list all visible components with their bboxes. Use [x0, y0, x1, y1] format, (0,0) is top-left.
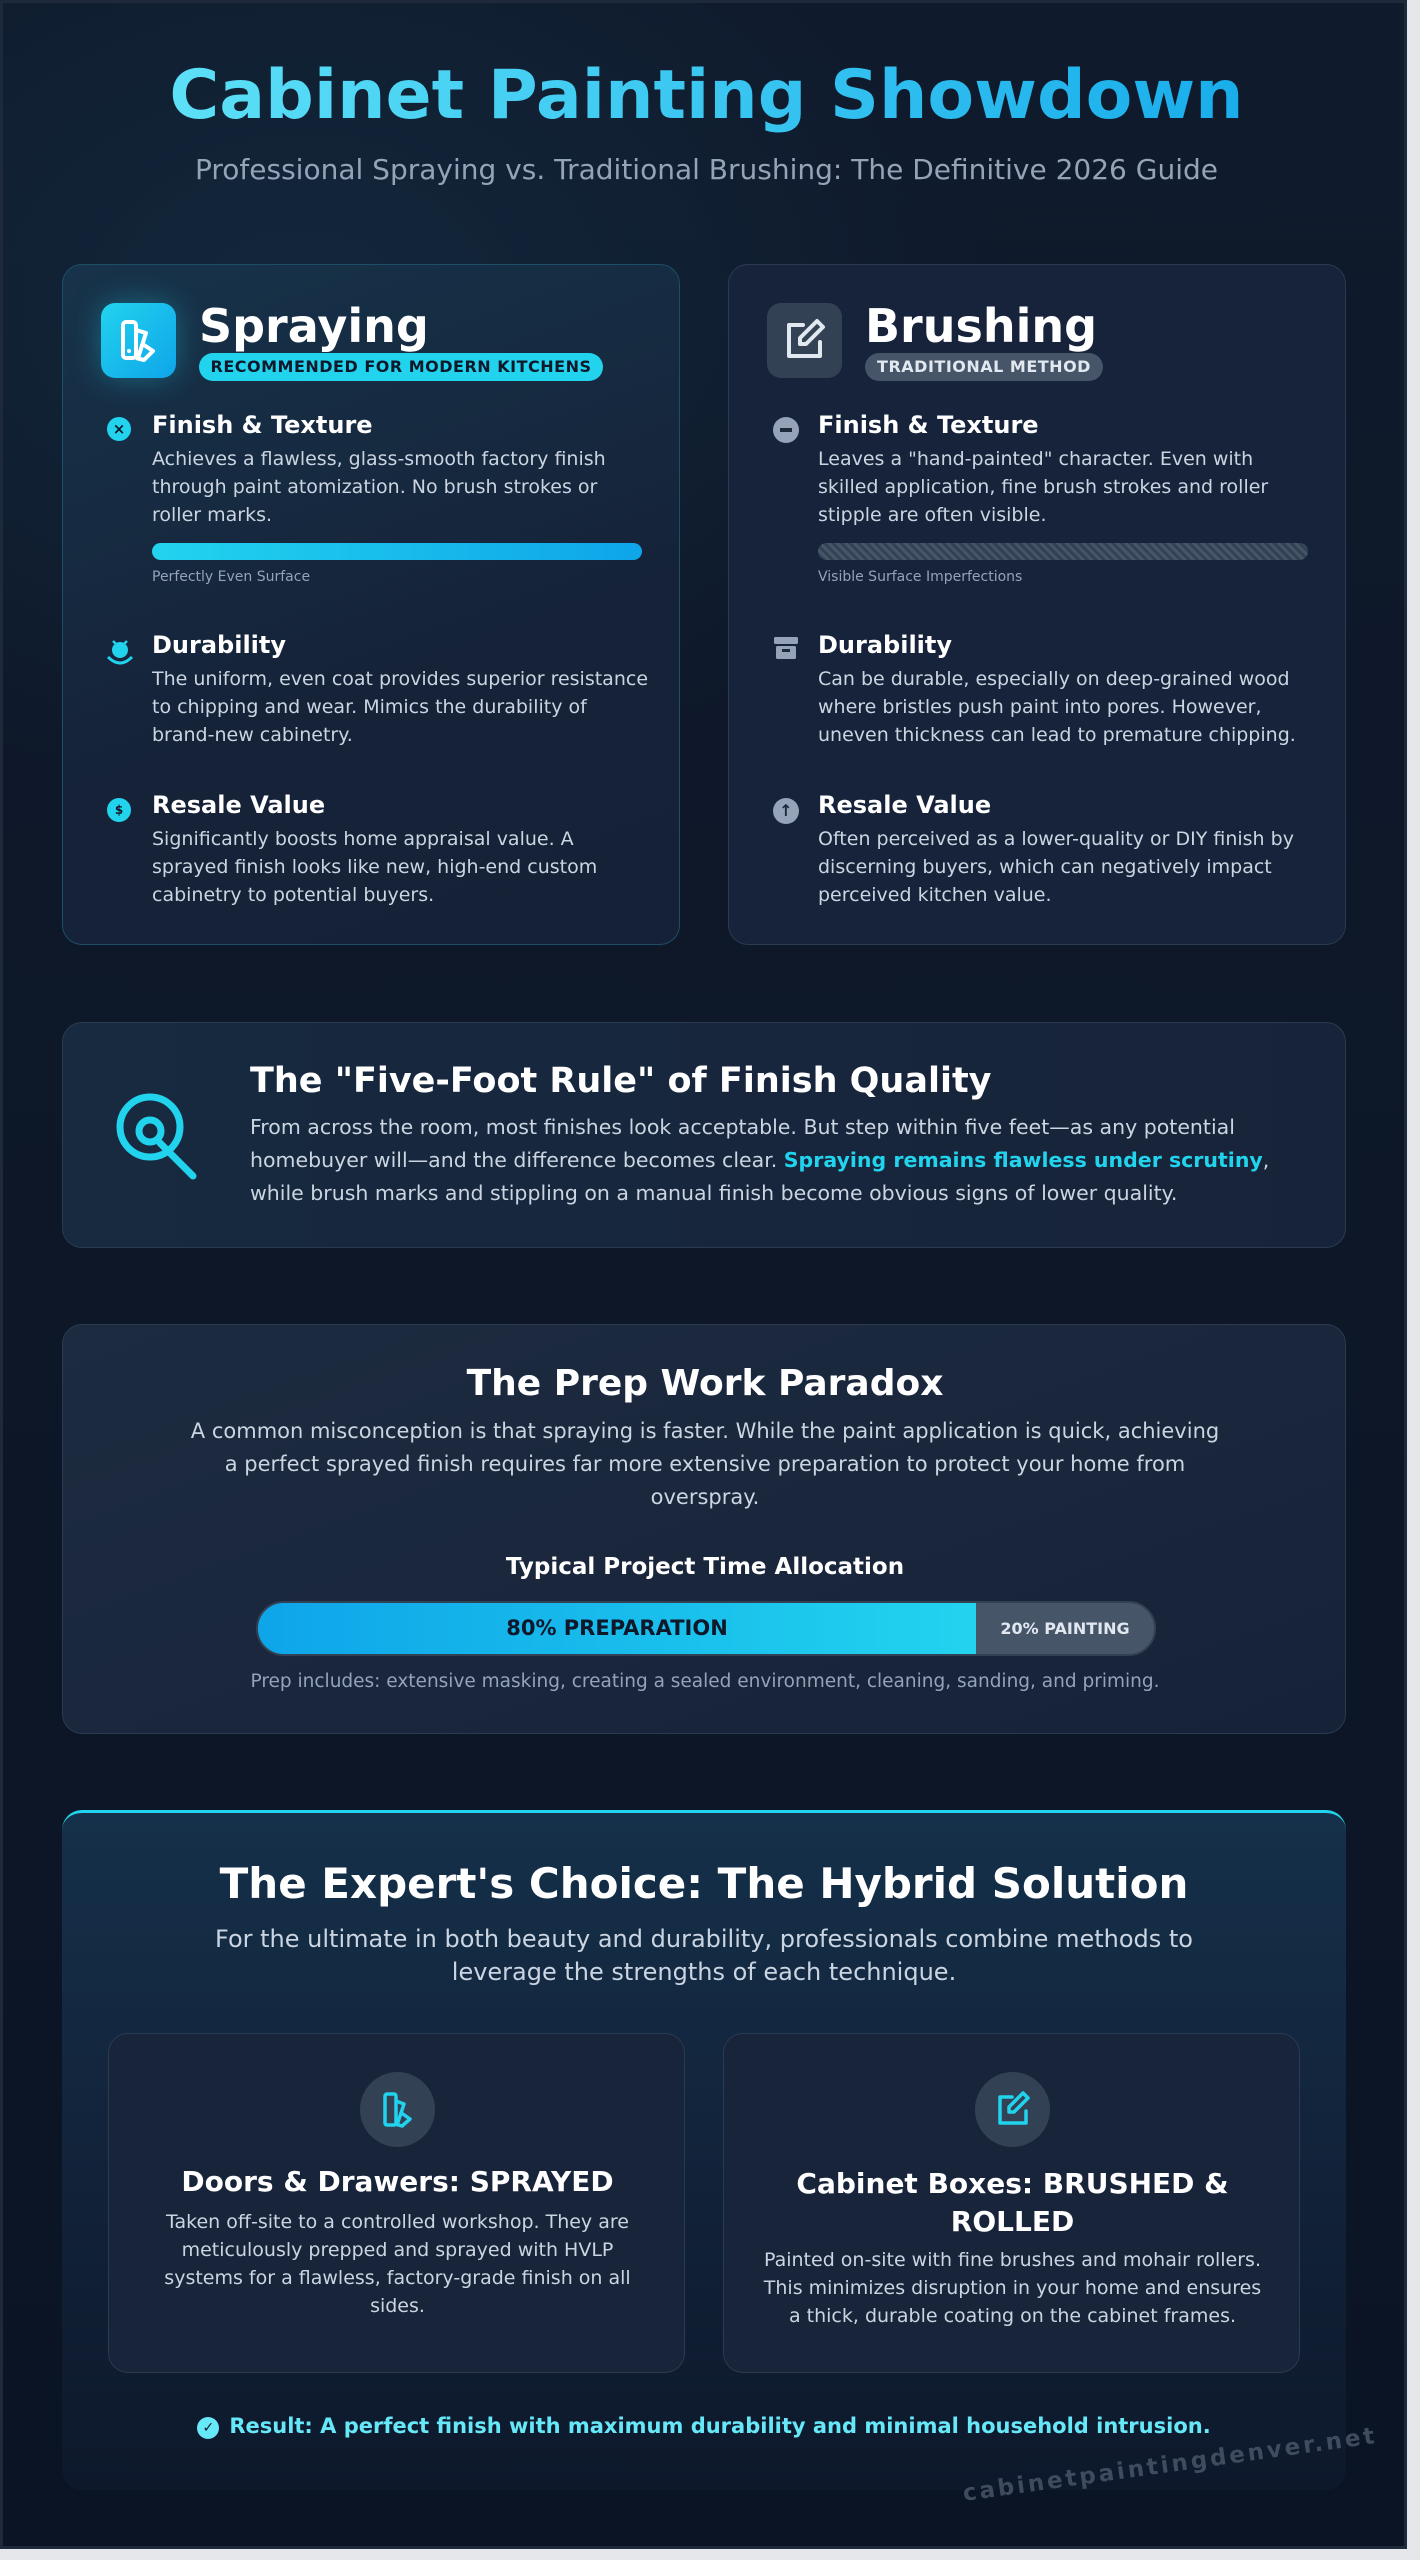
- card: boxes brushed: [723, 2033, 1300, 2373]
- bar: preparation: 80% PREPARATION: [506, 1616, 728, 1640]
- heading: The "Five-Foot Rule" of Finish Quality: [250, 1061, 992, 1101]
- item: durability: Durability: [152, 631, 286, 659]
- bar: imperfections: [818, 543, 1308, 560]
- icon: resale: [107, 798, 131, 822]
- panel: brushing: Visible Surface Imperfections: [818, 569, 1022, 585]
- icon: magnifier: [116, 1094, 196, 1180]
- icon: resale: $: [115, 803, 123, 817]
- watermark: cabinetpaintingdenver.net: [961, 2423, 1379, 2507]
- icon: finish: ×: [113, 420, 125, 438]
- badge: TRADITIONAL METHOD: [877, 357, 1091, 376]
- item: resale: Resale Value: [818, 791, 991, 819]
- item: resale: Resale Value: [152, 791, 325, 819]
- icon: [975, 2072, 1050, 2147]
- item: finish: Achieves a flawless, glass-smooth factory finish through paint atomization. No brush strokes or roller marks.: [152, 448, 606, 526]
- icon: box: [774, 637, 798, 659]
- icon: durability: [107, 640, 133, 665]
- item: finish: Finish & Texture: [152, 411, 373, 439]
- title: Cabinet Painting Showdown: [169, 56, 1244, 135]
- badge: [865, 353, 1103, 381]
- icon: arrow up: ↑: [779, 801, 793, 820]
- icon: [360, 2072, 435, 2147]
- item: finish: Finish & Texture: [818, 411, 1039, 439]
- item: durability: The uniform, even coat provides superior resistance to chipping and wear. Mimics the durability of brand‑new cabinetry.: [152, 668, 648, 746]
- item: resale: Often perceived as a lower-quality or DIY finish by discerning buyers, which can negatively impact perceived kitchen value.: [818, 828, 1294, 906]
- icon: arrow up: [773, 798, 799, 824]
- text: For the ultimate in both beauty and durability, professionals combine methods to leverage the strengths of each technique.: [215, 1925, 1193, 1986]
- item: resale: [152, 791, 597, 906]
- result line: ✓: [202, 2420, 214, 2436]
- text: Painted on-site with fine brushes and mohair rollers. This minimizes disruption in your home and ensures a thick, durable coating on the cabinet frames.: [764, 2249, 1261, 2327]
- badge: [199, 353, 603, 381]
- icon: spray swatch: [101, 303, 176, 378]
- item: finish: [152, 411, 642, 585]
- bar: preparation: [258, 1603, 976, 1654]
- item: finish: Leaves a "hand-painted" character. Even with skilled application, fine brush strokes and roller stipple are often visible.: [818, 448, 1268, 526]
- chart title: Typical Project Time Allocation: [506, 1554, 904, 1580]
- heading: Doors & Drawers: SPRAYED: [181, 2165, 614, 2198]
- item: durability: [152, 631, 648, 746]
- text: From across the room, most finishes look acceptable. But step within five feet—as any potential homebuyer will—and the difference becomes clear. Spraying remains flawless under scrutiny, while brush marks and stippling on a manual finish become obvious signs of lower quality.: [250, 1115, 1269, 1205]
- badge: RECOMMENDED FOR MODERN KITCHENS: [210, 357, 592, 376]
- item: resale: [818, 791, 1294, 906]
- heading: The Expert's Choice: The Hybrid Solution: [220, 1859, 1188, 1908]
- card: doors sprayed: [108, 2033, 685, 2373]
- bar: painting: 20% PAINTING: [1000, 1619, 1130, 1638]
- item: durability: Durability: [818, 631, 952, 659]
- panel: brushing: [728, 264, 1346, 945]
- panel: spraying: Perfectly Even Surface: [152, 569, 310, 585]
- heading: The Prep Work Paradox: [467, 1363, 943, 1404]
- text: Taken off-site to a controlled workshop. They are meticulously prepped and sprayed with HVLP systems for a flawless, factory-grade finish on all sides.: [164, 2211, 631, 2317]
- heading: Brushing: Brushing: [865, 299, 1097, 353]
- panel: hybrid solution: [62, 1810, 1346, 2490]
- item: durability: Can be durable, especially on deep-grained wood where bristles push paint into pores. However, uneven thickness can lead to premature chipping.: [818, 668, 1296, 746]
- heading: Cabinet Boxes: BRUSHED & ROLLED: [796, 2167, 1229, 2238]
- item: finish: [818, 411, 1308, 585]
- icon: finish: [107, 417, 131, 441]
- item: resale: Significantly boosts home appraisal value. A sprayed finish looks like new, high-end custom cabinetry to potential buyers.: [152, 828, 597, 906]
- icon: minus: [773, 417, 799, 443]
- subtitle: Professional Spraying vs. Traditional Brushing: The Definitive 2026 Guide: [195, 153, 1218, 186]
- panel: prep work: [62, 1324, 1346, 1734]
- item: durability: [818, 631, 1296, 746]
- bar: even surface: [152, 543, 642, 560]
- heading: Spraying: Spraying: [199, 299, 429, 353]
- result line: Result: A perfect finish with maximum durability and minimal household intrusion.: [229, 2414, 1211, 2438]
- icon: brush edit: [767, 303, 842, 378]
- bar chart: [256, 1601, 1156, 1656]
- panel: spraying: [62, 264, 680, 945]
- panel: five-foot rule: [62, 1022, 1346, 1248]
- caption: Prep includes: extensive masking, creating a sealed environment, cleaning, sanding, and priming.: [250, 1671, 1160, 1692]
- text: A common misconception is that spraying is faster. While the paint application is quick, achieving a perfect sprayed finish requires far more extensive preparation to protect your home from overspray.: [191, 1419, 1219, 1509]
